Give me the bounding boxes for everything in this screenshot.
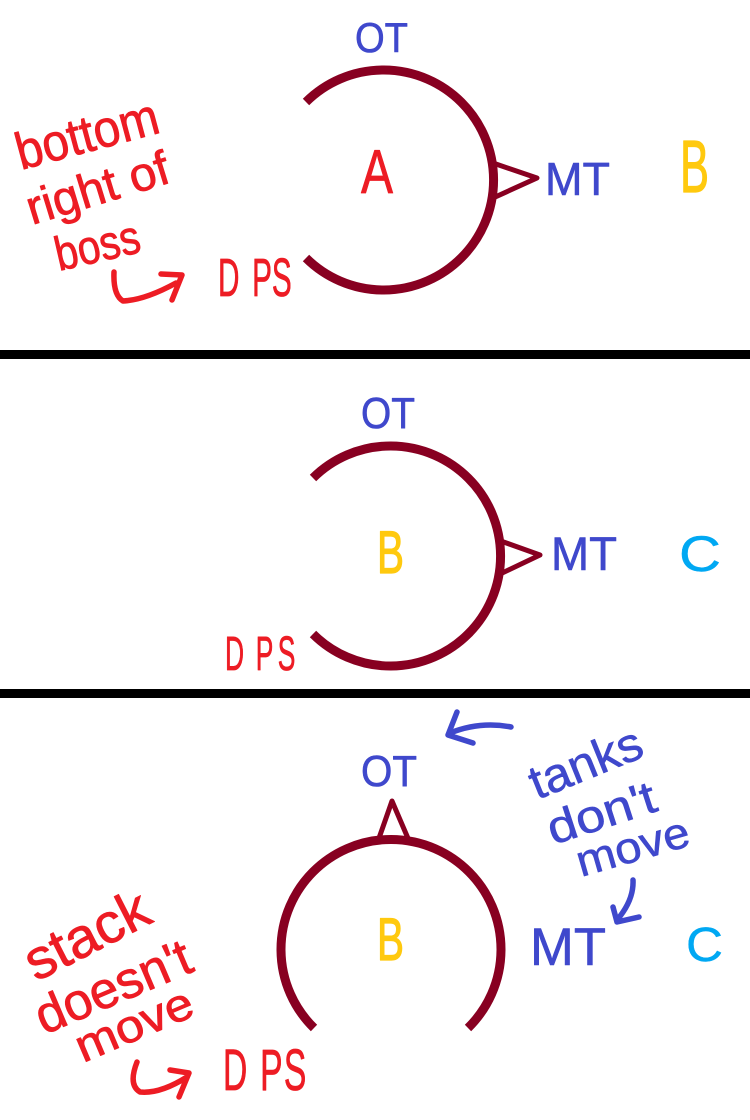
arrow: to DPS <box>133 1062 189 1097</box>
label: MT: MT <box>551 527 617 580</box>
label: OT: OT <box>361 389 415 438</box>
marker: B: B <box>680 125 709 208</box>
marker: B: B <box>377 906 404 973</box>
label: MT: MT <box>545 153 610 205</box>
note: tanks don't move <box>521 717 695 887</box>
note: stack doesn't move: move <box>67 976 201 1072</box>
note: bottom right of boss: boss <box>50 211 145 282</box>
note: tanks don't move: don't <box>540 770 663 855</box>
note: stack doesn't move: doesn't <box>26 928 201 1046</box>
boss ring <box>306 70 494 290</box>
label: DPS: DPS <box>218 249 292 308</box>
note: bottom right of boss <box>9 88 176 282</box>
marker: A: A <box>361 138 393 207</box>
arrow: to OT <box>448 712 511 743</box>
arrow: to DPS <box>114 272 182 301</box>
panel: boss turned <box>13 712 723 1103</box>
panel: boss at A <box>9 14 709 308</box>
boss facing cone <box>498 540 540 575</box>
label: DPS: DPS <box>225 628 295 681</box>
note: stack doesn't move <box>13 876 201 1072</box>
panel: boss at B <box>225 389 721 681</box>
label: DPS: DPS <box>223 1039 306 1103</box>
note: stack doesn't move: stack <box>13 876 161 993</box>
boss ring <box>281 839 501 1028</box>
marker: C: C <box>686 919 723 972</box>
boss facing cone <box>378 801 410 843</box>
label: OT: OT <box>361 747 417 796</box>
note: tanks don't move: tanks <box>521 717 651 810</box>
label: MT: MT <box>530 918 606 977</box>
note: bottom right of boss: right of <box>20 142 176 236</box>
label: OT: OT <box>355 14 408 61</box>
arrow: to MT <box>613 880 639 922</box>
boss ring <box>313 446 501 666</box>
marker: C: C <box>679 526 721 582</box>
marker: B: B <box>377 519 404 586</box>
boss facing cone <box>493 163 537 198</box>
note: tanks don't move: move <box>570 808 695 887</box>
note: bottom right of boss: bottom <box>9 88 165 182</box>
